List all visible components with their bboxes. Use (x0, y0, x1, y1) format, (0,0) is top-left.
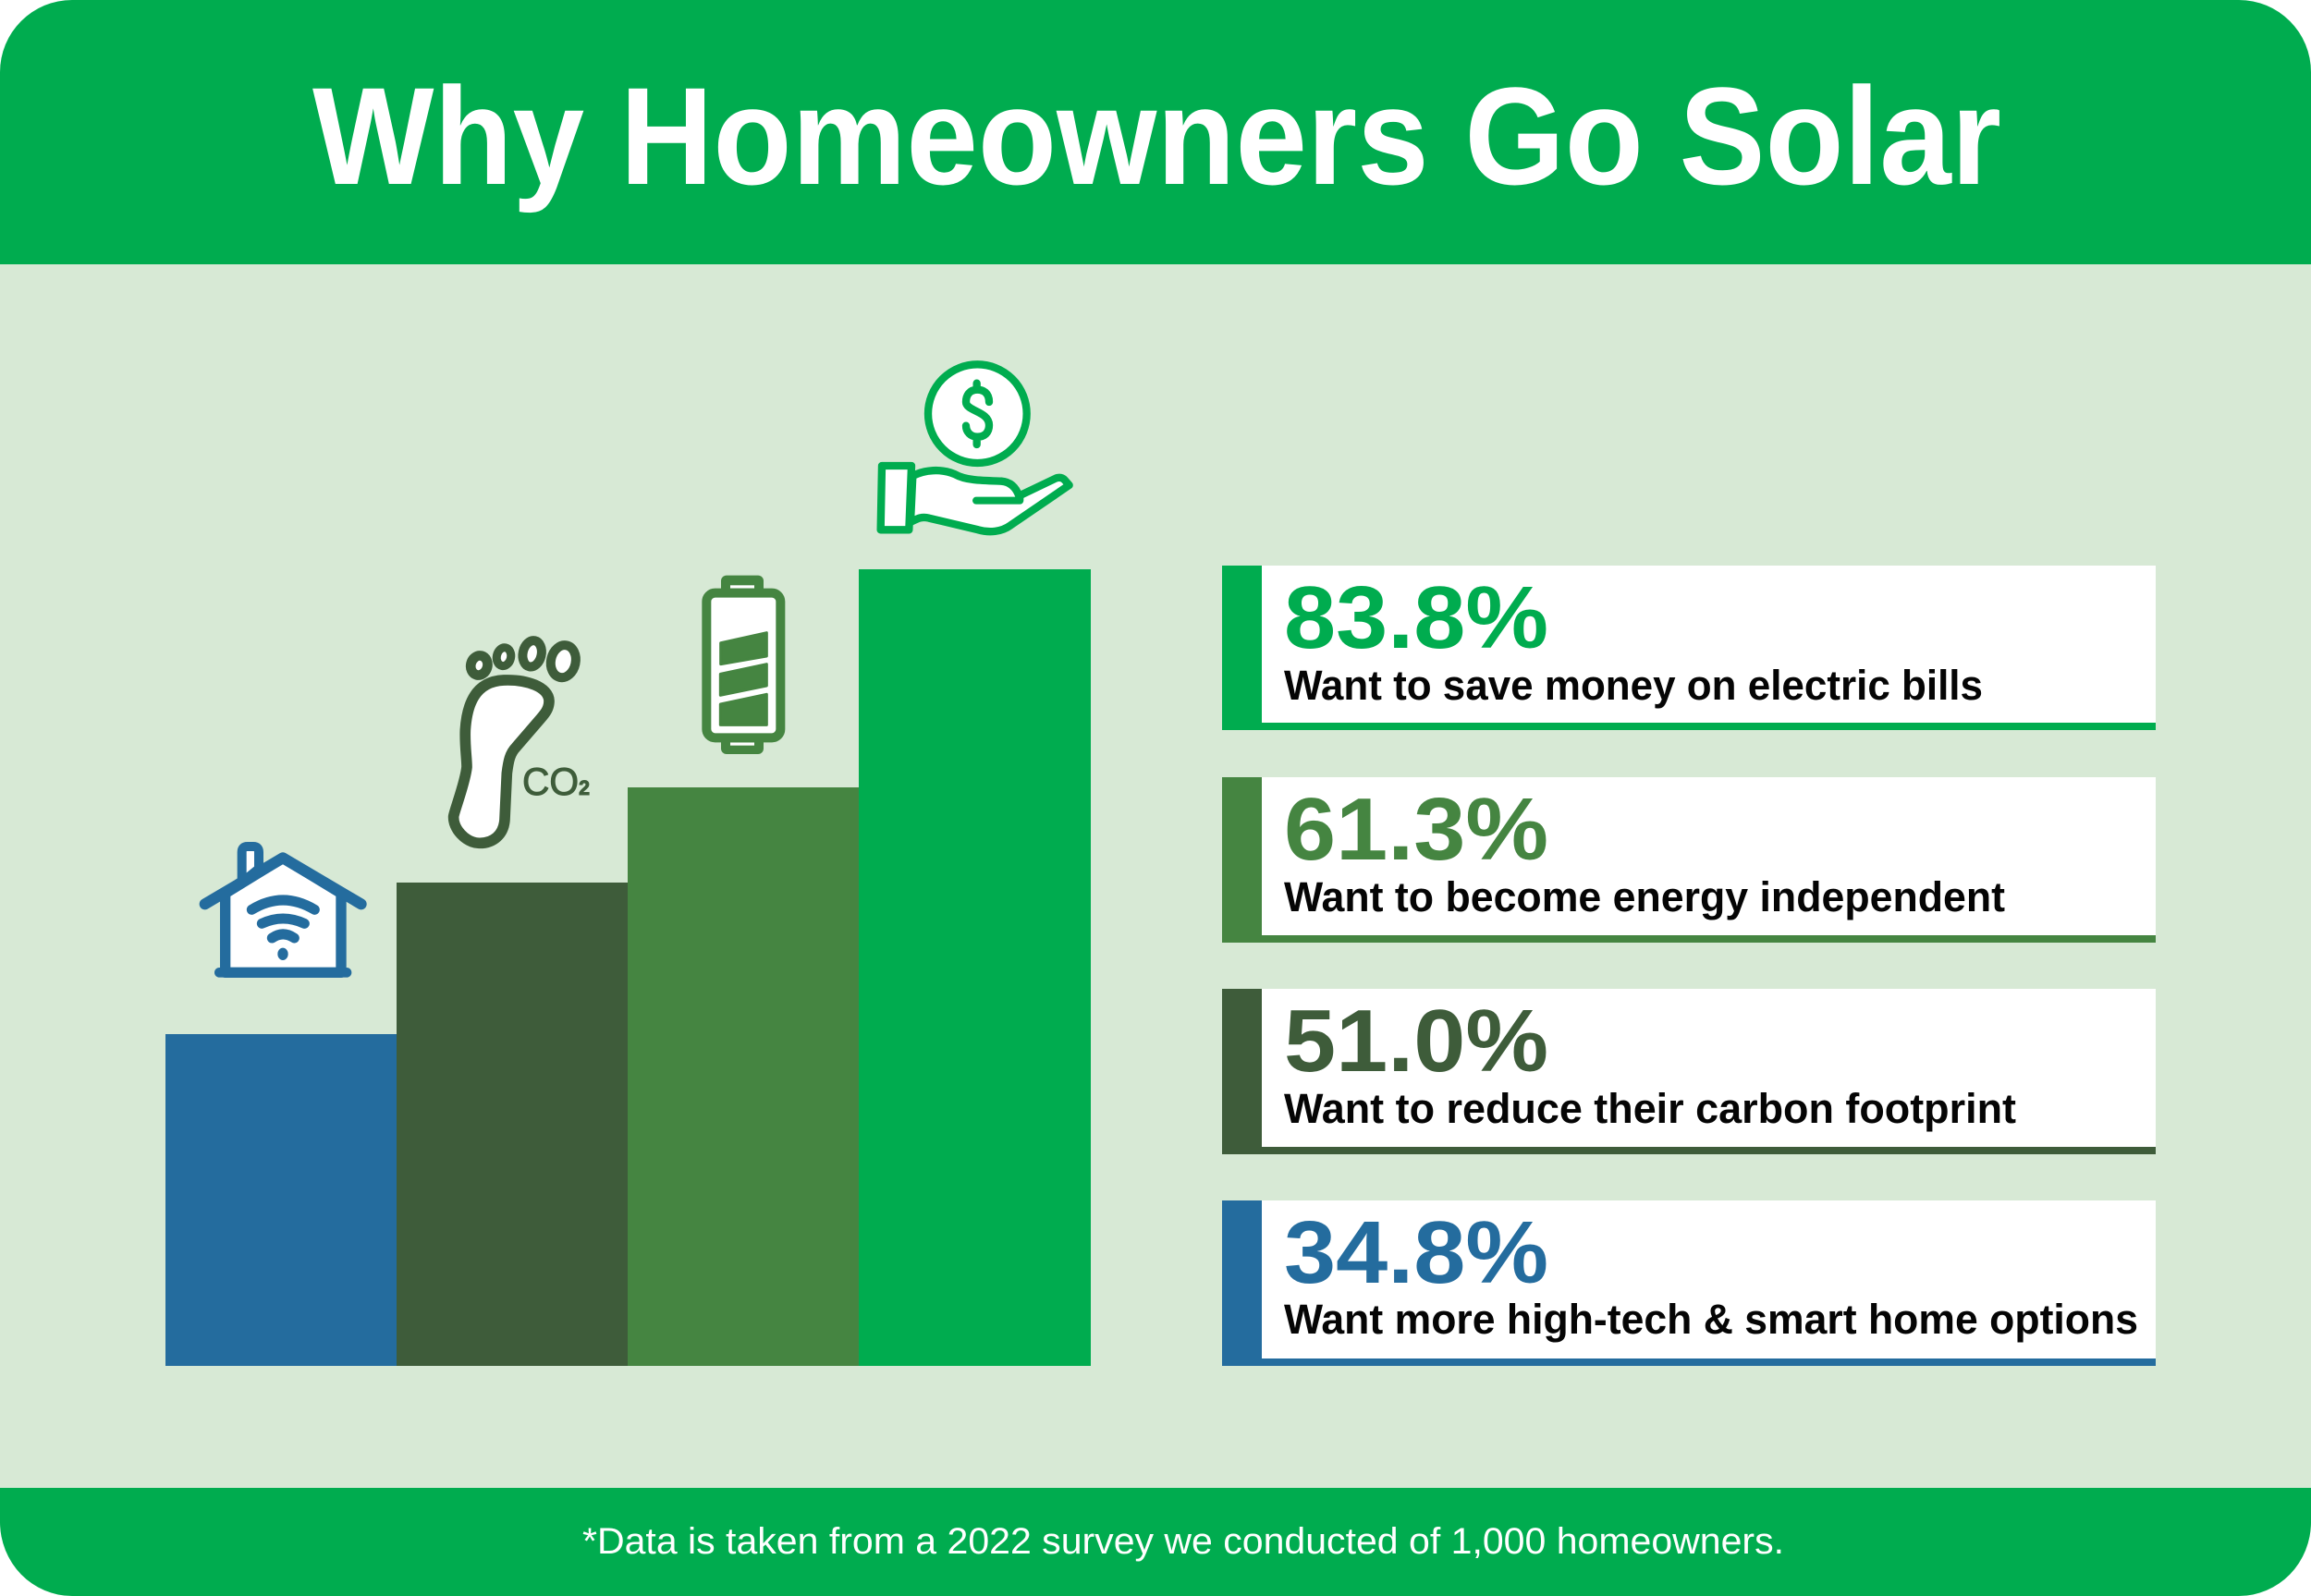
bar: carbon footprint 51.0% (397, 883, 628, 1366)
stat label: Want to reduce their carbon footprint (1284, 1085, 2016, 1132)
bar: energy independent 61.3% (628, 787, 859, 1366)
panel: light green body background (0, 264, 2311, 1488)
footnote: *Data is taken from a 2022 survey we conducted of 1,000 homeowners. (582, 1521, 1784, 1562)
icon label: CO2: CO2 (522, 760, 590, 803)
stat number: 83.8% (1284, 568, 1548, 667)
panel: stat 51.0% (1222, 989, 2156, 1154)
stat label: Want more high-tech & smart home options (1284, 1296, 2138, 1343)
stat number: 61.3% (1284, 780, 1548, 879)
stat label: Want to become energy independent (1284, 873, 2005, 920)
icon: hand holding dollar coin (881, 364, 1070, 531)
panel: stat 34.8% (1222, 1200, 2156, 1366)
stat number: 51.0% (1284, 992, 1548, 1090)
bar: save money 83.8% (859, 569, 1091, 1366)
icon: carbon footprint (454, 639, 579, 843)
bar chart (165, 569, 1091, 1366)
title: Why Homeowners Go Solar (312, 58, 2001, 213)
footer band (0, 1488, 2311, 1596)
icon: smart home with wifi (205, 847, 361, 972)
header band (0, 0, 2311, 264)
panel: stat 83.8% (1222, 566, 2156, 730)
stat label: Want to save money on electric bills (1284, 662, 1983, 709)
panel: stat 61.3% (1222, 777, 2156, 943)
bar: smart home 34.8% (165, 1034, 397, 1366)
icon: battery (706, 576, 780, 754)
stat number: 34.8% (1284, 1203, 1548, 1302)
